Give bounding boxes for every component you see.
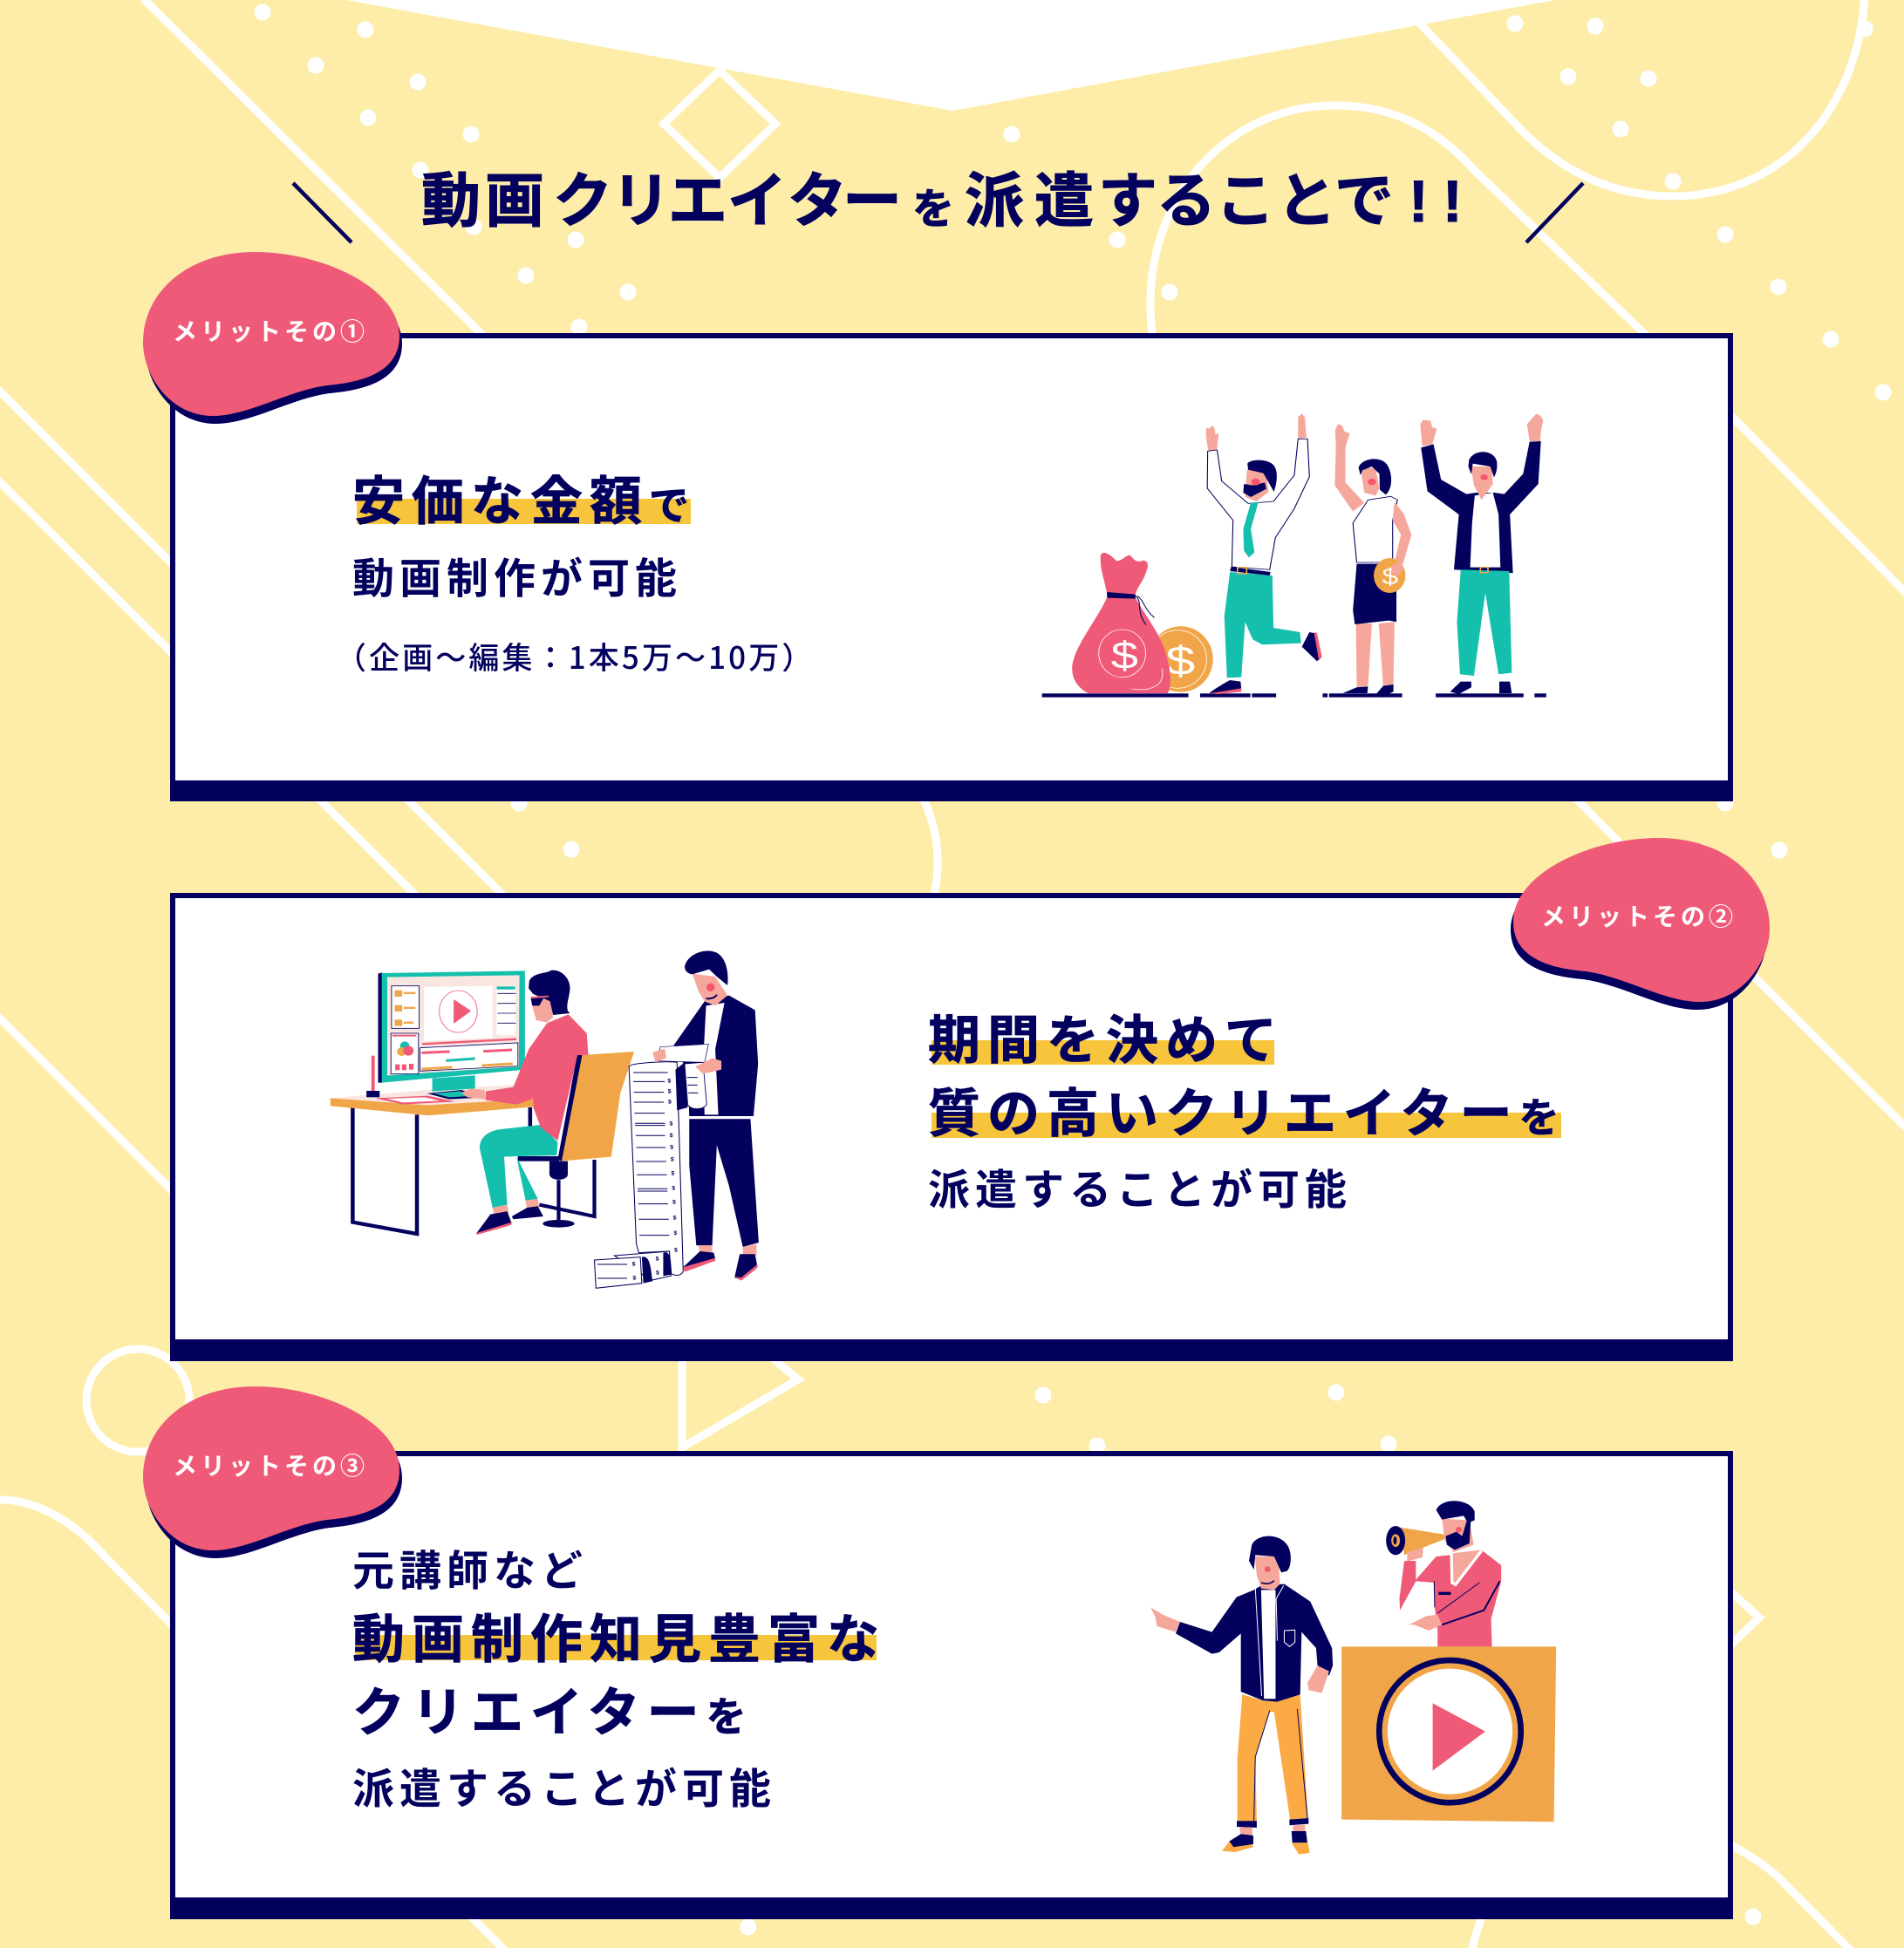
panel 1 subheading: 動画制作が可能	[352, 544, 682, 605]
desk	[331, 1056, 533, 1234]
illustration: video editor and client with receipt	[331, 950, 759, 1288]
title text: 動画クリエイター	[421, 153, 902, 239]
receipt paper: $	[656, 1256, 659, 1262]
figure: man with megaphone	[1386, 1501, 1501, 1646]
icon: gold coin	[1149, 626, 1213, 692]
panel 2 highlight line 1	[932, 1040, 1274, 1065]
panel 1 frame	[170, 333, 1733, 801]
illustration: presenters with video play board	[1150, 1501, 1556, 1855]
panel 2: fixed term	[170, 893, 1733, 1361]
receipt paper: $	[672, 1186, 675, 1192]
panel 3 intro line: 元講師など	[352, 1536, 588, 1597]
video board with play button	[1341, 1646, 1556, 1822]
panel 1 highlight	[357, 499, 691, 524]
panel 2 heading line 2: 質の高いクリエイターを	[928, 1072, 1559, 1148]
title decoration: left slash	[293, 183, 351, 242]
badge 3 label: メリットその③	[173, 1447, 368, 1482]
badge: merit 3	[143, 1386, 402, 1558]
badge: merit 2	[1511, 838, 1770, 1010]
badge 1 shape	[143, 252, 402, 424]
receipt paper: $	[669, 1121, 673, 1127]
icon: money bag: $	[1111, 634, 1138, 677]
receipt paper: $	[673, 1230, 677, 1236]
icon: money bag	[1072, 553, 1170, 693]
receipt paper: $	[667, 1078, 671, 1084]
figure: jumping man	[1206, 413, 1322, 694]
receipt paper: $	[632, 1261, 636, 1267]
receipt paper: $	[672, 1170, 675, 1176]
receipt paper: $	[670, 1144, 673, 1150]
panel 3 frame	[170, 1451, 1733, 1919]
figure: woman holding coin	[1334, 425, 1411, 698]
receipt paper: $	[673, 1216, 677, 1222]
figure: man in navy jacket	[1420, 413, 1543, 694]
panel 2 frame	[170, 893, 1733, 1361]
receipt paper: $	[668, 1099, 672, 1105]
panel 3: experienced creators	[170, 1451, 1733, 1919]
figure: client reading receipt	[652, 950, 759, 1281]
badge: merit 1	[143, 252, 402, 424]
illustration: money and cheering people	[1042, 413, 1546, 698]
receipt paper: $	[672, 1200, 676, 1206]
panel 3 heading line 2: クリエイターを	[352, 1671, 747, 1747]
badge 1 label: メリットその①	[173, 313, 368, 348]
panel 2 heading line 1: 期間を決めて	[928, 998, 1284, 1074]
receipt paper: $	[674, 1247, 678, 1253]
panel 3 subheading: 派遣することが可能	[352, 1754, 776, 1815]
panel 3 heading line 1: 動画制作知見豊富な	[352, 1597, 886, 1673]
monitor	[378, 971, 525, 1100]
figure: man pointing	[1150, 1536, 1333, 1855]
figure: seated editor	[461, 971, 588, 1235]
receipt paper	[595, 1062, 683, 1288]
title text: を	[912, 174, 954, 235]
icon: gold coin: $	[1165, 638, 1195, 684]
panel 3 highlight	[355, 1635, 877, 1660]
receipt paper: $	[656, 1270, 659, 1276]
title text: 派遣することで	[965, 153, 1394, 239]
badge 3 shape	[143, 1386, 402, 1558]
office chair	[518, 1052, 634, 1228]
badge 2 shape	[1511, 838, 1770, 1010]
title	[293, 153, 1583, 242]
panel 1: low cost	[170, 333, 1733, 801]
figure: woman holding coin: $	[1382, 565, 1399, 589]
panel 2 subheading: 派遣することが可能	[928, 1155, 1352, 1216]
panel 2 highlight line 2	[932, 1113, 1561, 1138]
receipt paper: $	[668, 1088, 672, 1094]
panel 1 price note: （企画～編集：1本5万～10万）	[336, 634, 815, 678]
panel 1 heading: 安価な金額で	[352, 460, 689, 535]
title text: !!	[1409, 168, 1463, 235]
ground line	[1042, 693, 1546, 698]
receipt paper: $	[670, 1133, 673, 1139]
title decoration: right slash	[1526, 183, 1583, 242]
receipt paper: $	[632, 1275, 636, 1281]
badge 2 label: メリットその②	[1541, 898, 1737, 933]
receipt paper: $	[671, 1156, 674, 1162]
